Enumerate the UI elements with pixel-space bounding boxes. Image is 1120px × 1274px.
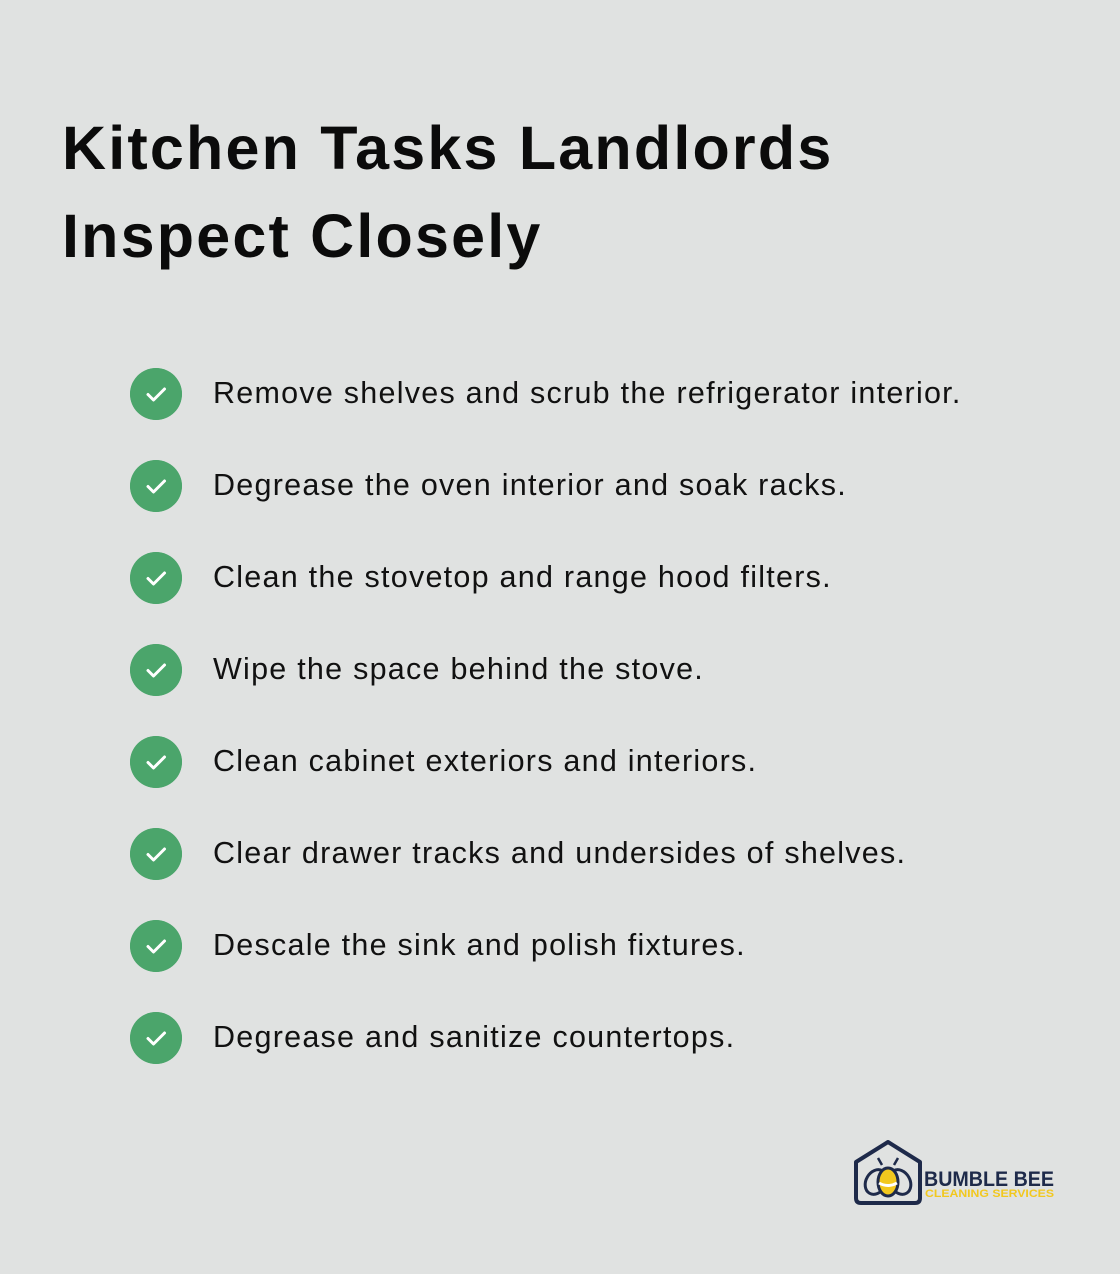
item 5 [130,736,757,788]
item 2 [130,460,847,512]
item 1: Remove shelves and scrub the refrigerator interior. [213,376,962,410]
item 4 [130,644,704,696]
item 8 [130,1012,735,1064]
item 5: Clean cabinet exteriors and interiors. [213,744,757,778]
icon: house with bee [856,1142,920,1203]
item 3: Clean the stovetop and range hood filters. [213,560,832,594]
item 1 [130,368,962,420]
item 7: Descale the sink and polish fixtures. [213,928,746,962]
checklist [130,368,962,1064]
title: Inspect Closely [62,202,542,270]
logo text: CLEANING SERVICES [925,1188,1054,1200]
item 2: Degrease the oven interior and soak racks. [213,468,847,502]
item 3 [130,552,832,604]
item 7 [130,920,746,972]
item 6: Clear drawer tracks and undersides of shelves. [213,836,906,870]
title [62,114,833,270]
item 8: Degrease and sanitize countertops. [213,1020,735,1054]
title: Kitchen Tasks Landlords [62,114,833,182]
logo [854,1140,1054,1205]
item 4: Wipe the space behind the stove. [213,652,704,686]
item 6 [130,828,906,880]
